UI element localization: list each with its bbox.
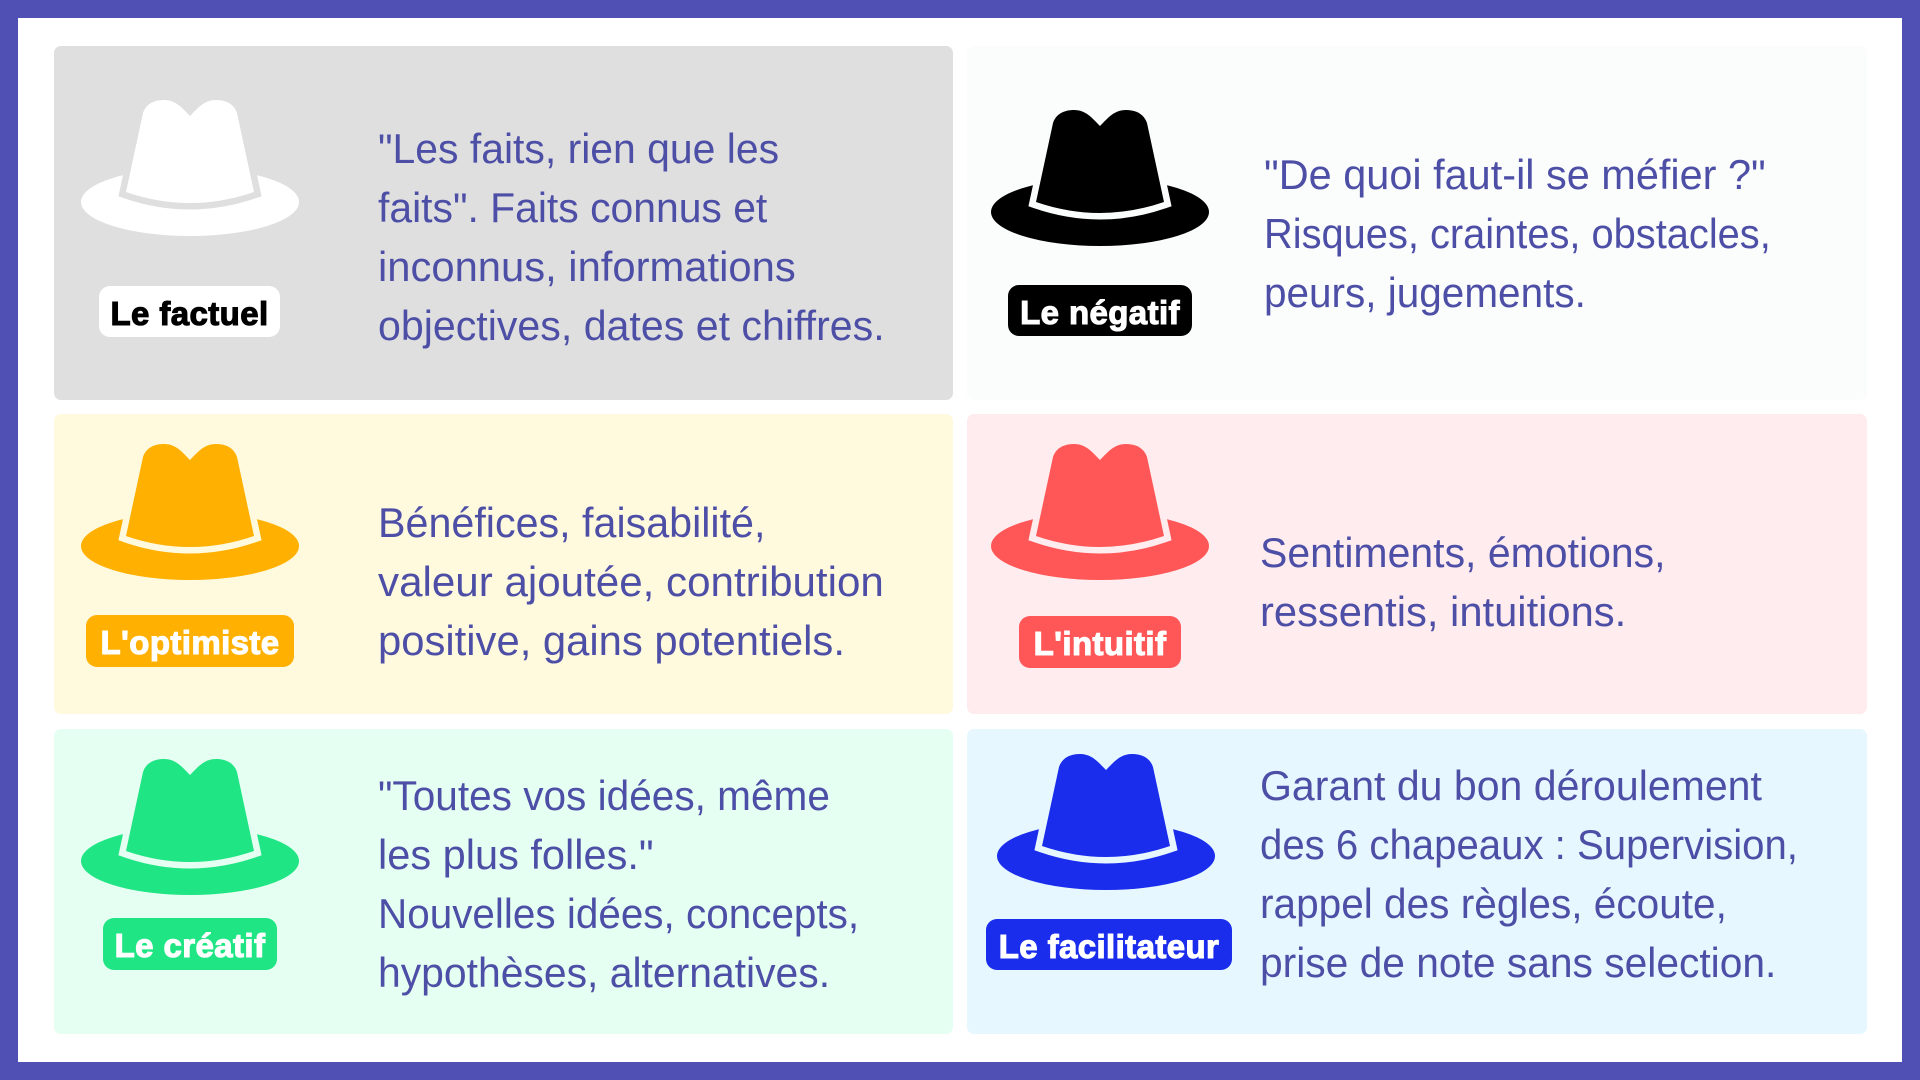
label: Le négatif: Le négatif [1020,294,1180,331]
label: Le factuel: Le factuel [110,295,269,332]
text: intuitif description: ressentis, intuitions. [1260,588,1626,635]
label: Le factuel [99,286,280,337]
icon: black hat [991,110,1209,246]
panel: le négatif [967,46,1867,400]
text: créatif description: Nouvelles idées, concepts, [378,890,859,937]
panel: l'intuitif [967,414,1867,714]
text: factuel description: faits". Faits connus et [378,184,767,231]
text: négatif description [1264,151,1771,316]
icon: blue hat [997,754,1215,890]
text: factuel description [378,125,885,349]
text: facilitateur description [1260,762,1798,986]
label: Le créatif: Le créatif [115,927,265,964]
text: factuel description: objectives, dates et chiffres. [378,302,885,349]
label: Le facilitateur [986,919,1232,970]
icon: white hat [81,100,299,236]
text: créatif description: les plus folles." [378,831,654,878]
text: facilitateur description: Garant du bon déroulement [1260,762,1762,809]
text: factuel description: inconnus, informations [378,243,796,290]
label: Le facilitateur: Le facilitateur [999,928,1219,965]
text: créatif description: hypothèses, alternatives. [378,949,830,996]
label: L'intuitif: L'intuitif [1034,625,1166,662]
label: L'optimiste [86,615,294,667]
text: créatif description: "Toutes vos idées, même [378,772,830,819]
text: optimiste description: Bénéfices, faisabilité, [378,499,765,546]
panel: le factuel [54,46,953,400]
text: négatif description: peurs, jugements. [1264,269,1586,316]
text: facilitateur description: des 6 chapeaux : Supervision, [1260,821,1798,868]
text: facilitateur description: rappel des règles, écoute, [1260,880,1727,927]
icon: green hat [81,759,299,895]
text: factuel description: "Les faits, rien que les [378,125,779,172]
label: Le négatif [1008,285,1192,336]
label: L'optimiste: L'optimiste [100,624,280,661]
label: L'intuitif [1019,616,1181,668]
label: Le créatif [103,918,277,970]
text: créatif description [378,772,859,996]
text: optimiste description: positive, gains potentiels. [378,617,845,664]
text: intuitif description [1260,529,1666,635]
text: facilitateur description: prise de note sans selection. [1260,939,1776,986]
panel: le créatif [54,729,953,1034]
icon: amber hat [81,444,299,580]
panel: l'optimiste [54,414,953,714]
icon: red hat [991,444,1209,580]
panel: le facilitateur [967,729,1867,1034]
text: optimiste description [378,499,884,664]
text: négatif description: Risques, craintes, obstacles, [1264,210,1771,257]
text: optimiste description: valeur ajoutée, contribution [378,558,884,605]
text: négatif description: "De quoi faut-il se méfier ?" [1264,151,1766,198]
text: intuitif description: Sentiments, émotions, [1260,529,1666,576]
